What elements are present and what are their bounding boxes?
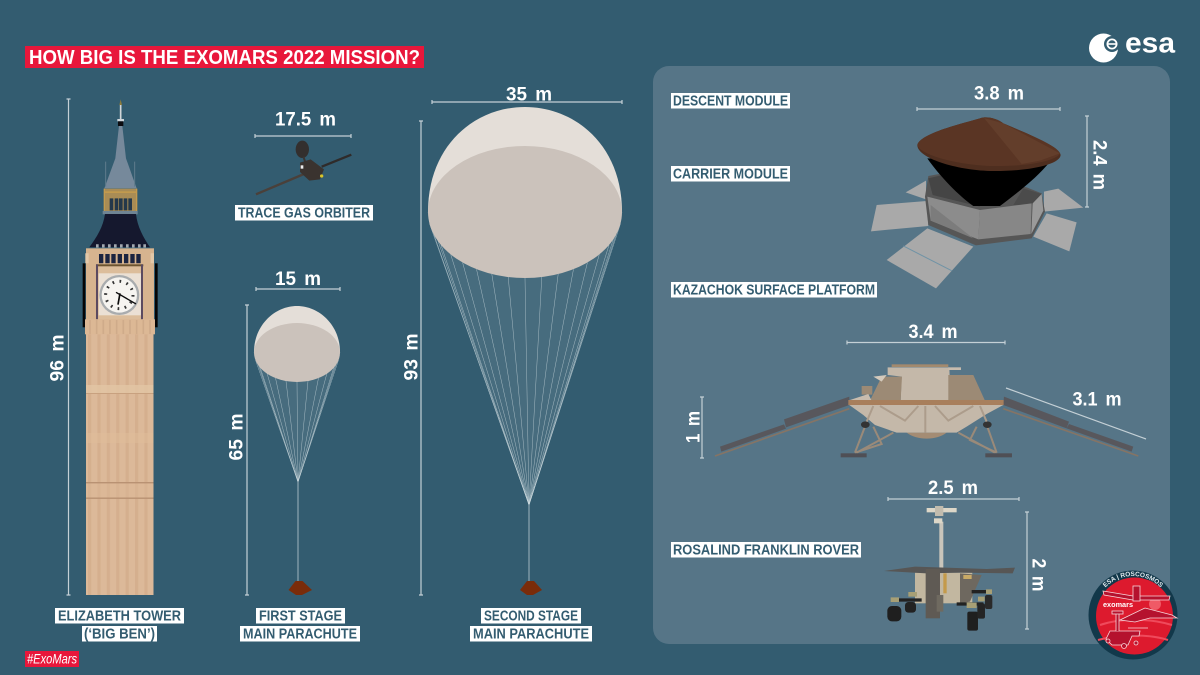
dimension: second parachute 35 m [432, 84, 622, 106]
tower shaft [86, 332, 154, 595]
title: HOW BIG IS THE EXOMARS 2022 MISSION? [29, 46, 420, 69]
tower belfry and spire [83, 99, 158, 334]
label: descent module: DESCENT MODULE [673, 94, 788, 110]
dimension: first parachute 15 m [256, 269, 340, 291]
dimension: descent module 3.8 m: 3.8 m [974, 84, 1024, 104]
dimension: platform width 3.4 m: 3.4 m [908, 322, 958, 343]
dimension: rover width 2.5 m: 2.5 m [928, 478, 978, 499]
label: Elizabeth Tower [55, 608, 184, 642]
dimension: first parachute 65 m: 65 m [226, 414, 248, 460]
dimension: descent module 2.4 m [1085, 116, 1110, 207]
icon: esa logo: esa [1125, 28, 1176, 60]
dimension: second parachute 93 m [402, 121, 423, 595]
illustration: Elizabeth Tower [83, 99, 158, 595]
label: second stage parachute: SECOND STAGE [484, 608, 578, 624]
dimension: orbiter 17.5 m [255, 110, 351, 138]
icon: esa logo [1089, 28, 1176, 62]
illustration: second stage parachute [428, 107, 622, 595]
label: first stage parachute [240, 608, 360, 642]
dimension: platform width 3.4 m [847, 322, 1005, 344]
label: Kazachok surface platform: KAZACHOK SURFACE PLATFORM [673, 282, 875, 298]
icon: clock face [99, 275, 139, 315]
label: second stage parachute: MAIN PARACHUTE [473, 626, 589, 642]
illustration: descent and carrier modules [871, 117, 1083, 288]
dimension: first parachute 15 m: 15 m [275, 269, 321, 290]
dimension: tower height 96 m: 96 m [48, 334, 68, 382]
illustration: Trace Gas Orbiter [256, 141, 351, 194]
label: first stage parachute: FIRST STAGE [259, 608, 342, 624]
illustration: first stage parachute [254, 306, 340, 595]
label: carrier module: CARRIER MODULE [673, 166, 788, 182]
dimension: rover height 2 m [1025, 512, 1048, 629]
dimension: rover height 2 m: 2 m [1028, 558, 1048, 592]
dimension: platform height 1 m [684, 397, 704, 458]
dimension: descent module 2.4 m: 2.4 m [1088, 140, 1110, 190]
dimension: platform height 1 m: 1 m [684, 411, 704, 443]
illustration: Rosalind Franklin rover [884, 506, 1015, 631]
dimension: first parachute 65 m [226, 305, 249, 595]
dimension: tower height 96 m [48, 99, 70, 595]
label: Rosalind Franklin rover: ROSALIND FRANKLIN ROVER [673, 542, 859, 558]
dimension: platform ramp 3.1 m [1006, 388, 1146, 439]
dimension: orbiter 17.5 m: 17.5 m [275, 110, 336, 130]
panel: mission hardware [653, 66, 1170, 644]
label: second stage parachute [470, 608, 592, 642]
label: Trace Gas Orbiter: TRACE GAS ORBITER [238, 206, 370, 222]
label: Elizabeth Tower: (‘BIG BEN’) [84, 626, 155, 642]
dimension: descent module 3.8 m [917, 84, 1060, 111]
label: Elizabeth Tower: ELIZABETH TOWER [58, 608, 181, 624]
label: first stage parachute: MAIN PARACHUTE [243, 626, 357, 642]
icon: ExoMars mission badge: exomars [1103, 602, 1133, 609]
illustration: Kazachok surface platform [715, 364, 1138, 457]
dimension: platform ramp 3.1 m: 3.1 m [1072, 390, 1122, 410]
dimension: rover width 2.5 m [888, 478, 1019, 501]
icon: ExoMars mission badge [1088, 570, 1178, 660]
label: hashtag: #ExoMars [27, 652, 77, 666]
icon: ExoMars mission badge: ESA | ROSCOSMOS [1102, 572, 1163, 588]
dimension: second parachute 93 m: 93 m [402, 334, 422, 380]
dimension: second parachute 35 m: 35 m [506, 84, 552, 106]
